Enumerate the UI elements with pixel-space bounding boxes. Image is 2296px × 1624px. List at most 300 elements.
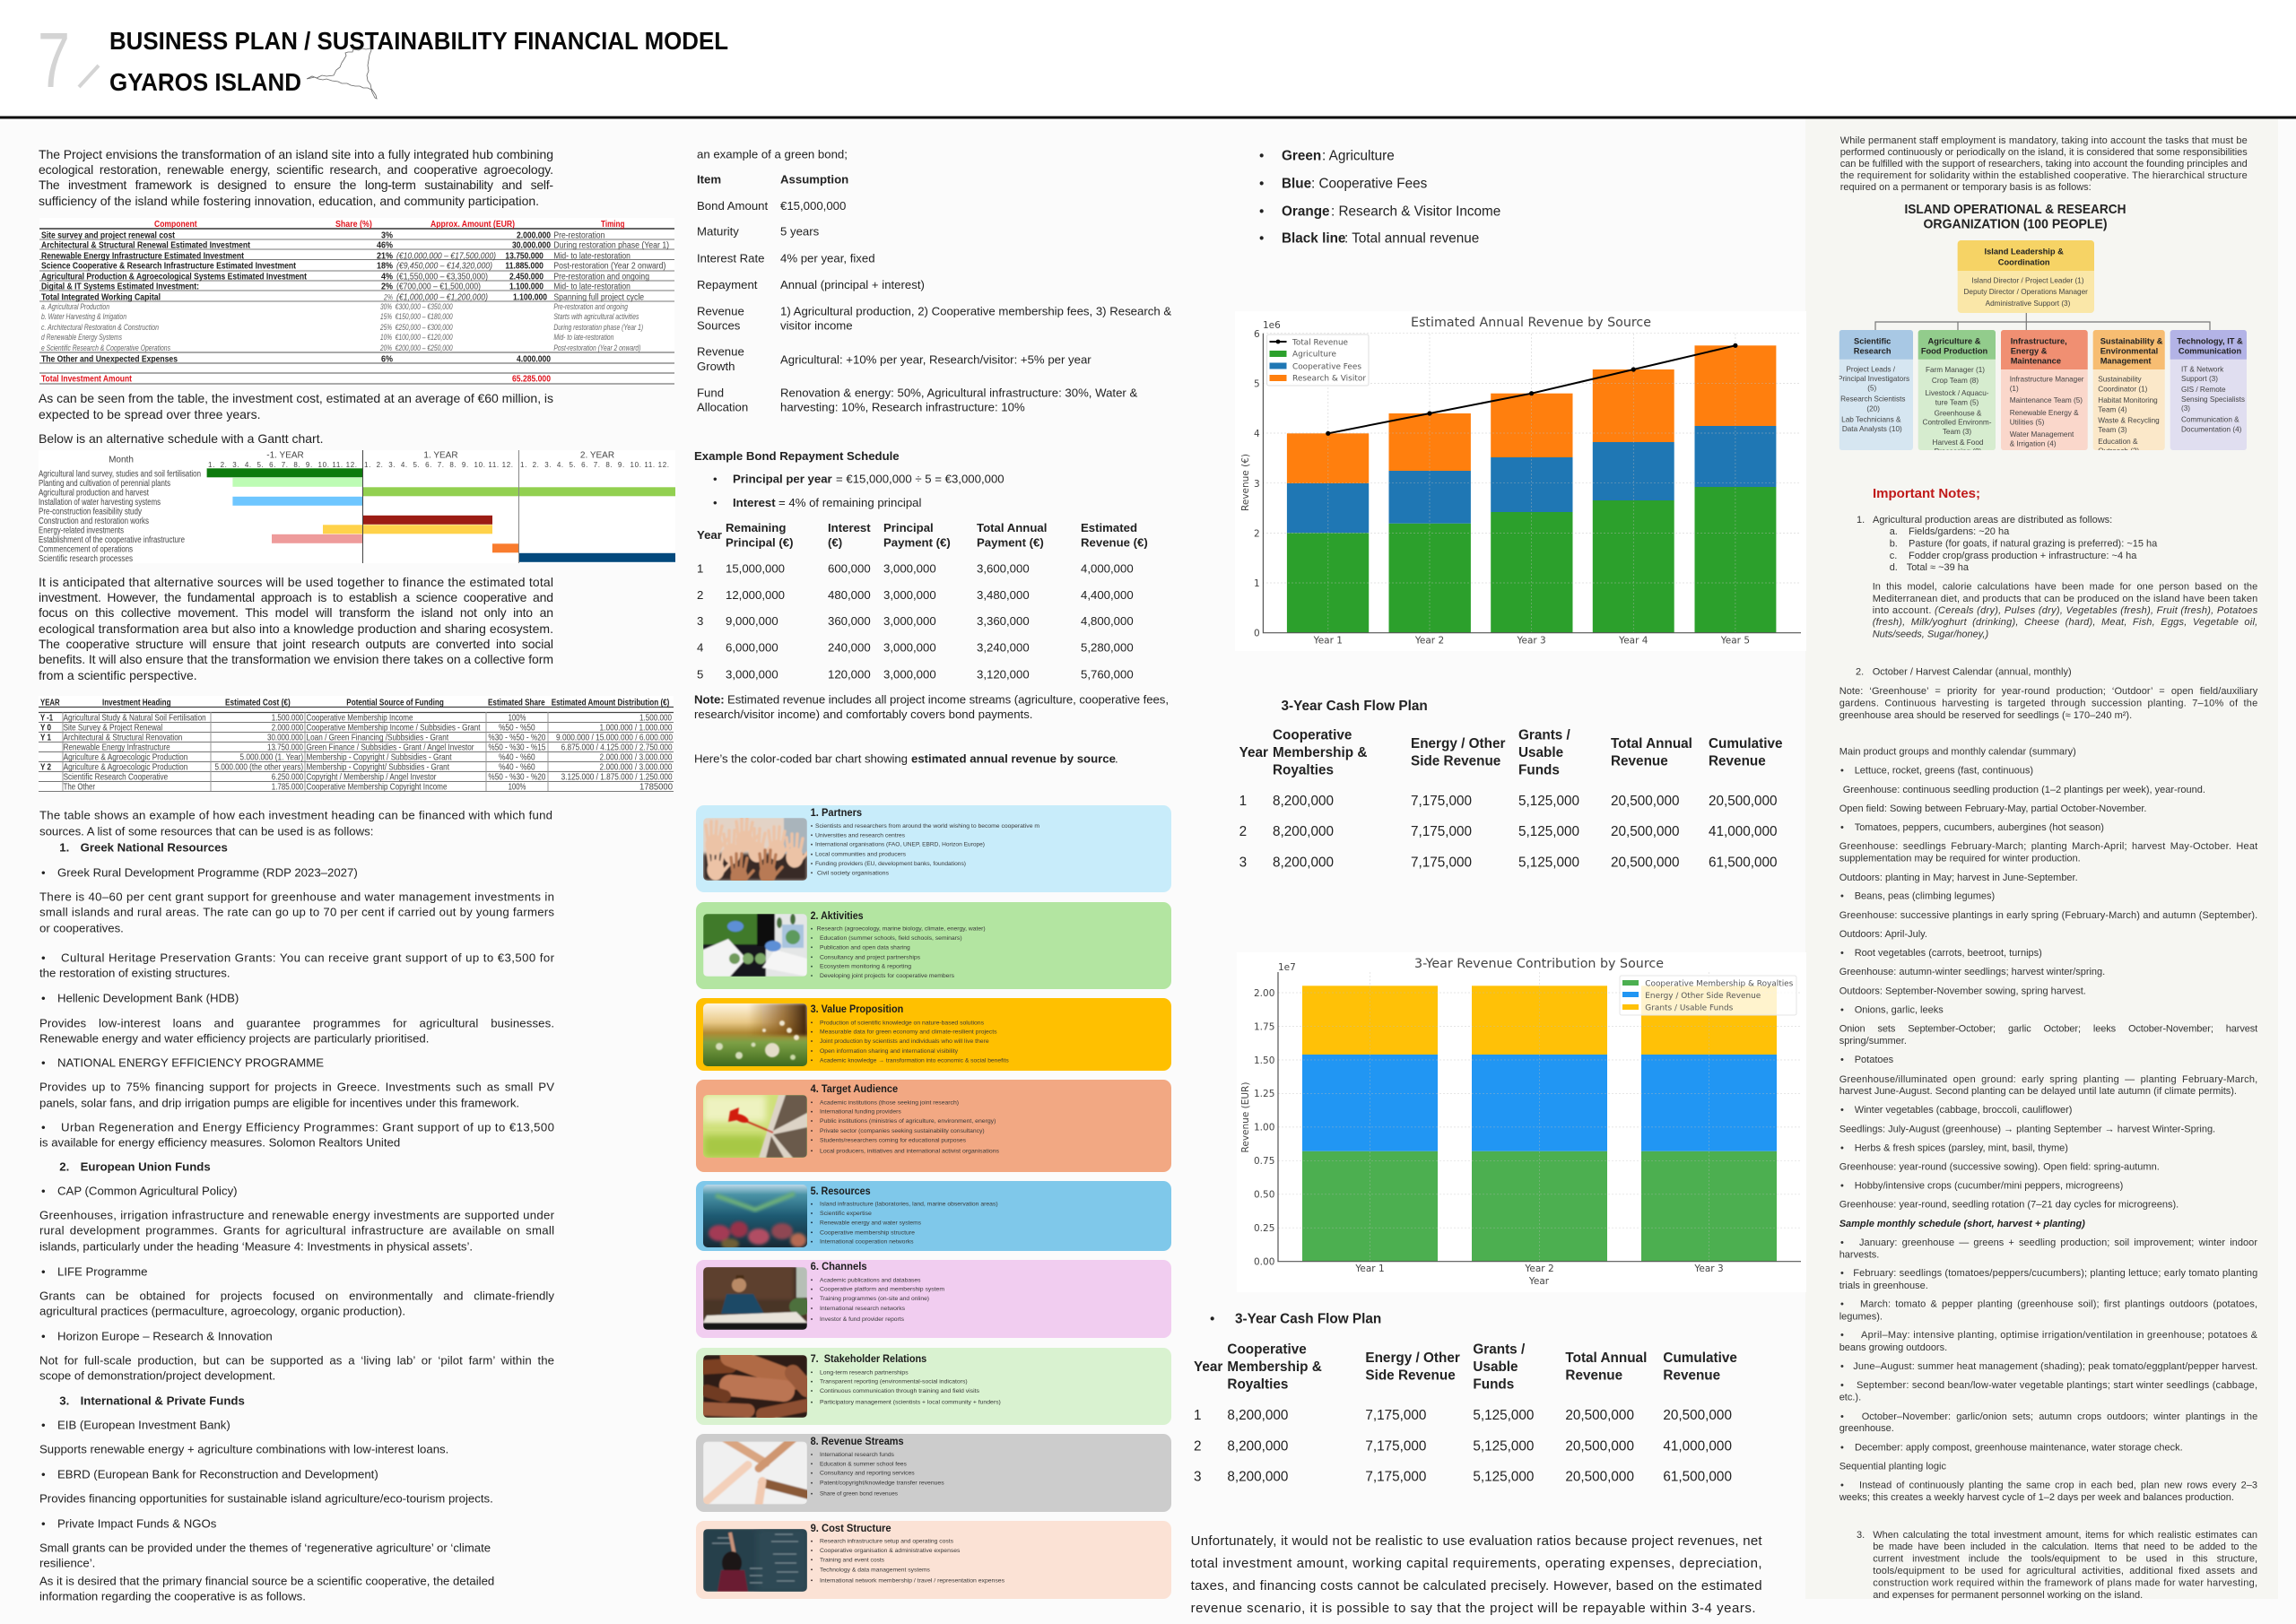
note 2: harvest calendar: Onions, garlic, leeks [1855,1005,1944,1016]
repayment table: Principal [883,521,934,534]
text: investment cost summary: As can be seen from the table, the investment cost, estimated at an average of €60 million, is [39,391,553,405]
investment cost table: Total Investment Amount [41,374,132,385]
column 4: staffing intro paragraph: can be fulfilled with the support of researchers, taking into account the founding principles and [1840,159,2248,169]
target audience list: Private sector (companies seeking sustainability consultancy) [820,1128,985,1134]
text: funding resources list: • [41,1329,46,1343]
text: funding resources list: agricultural practices (permaculture, agroecology, organic production). [39,1304,405,1318]
note 2: harvest calendar: Main product groups and monthly calendar (summary) [1839,746,2076,757]
axis labels: 2.00 [1254,988,1274,999]
bar chart intro: estimated annual revenue by source [911,751,1116,766]
column 2: green bond assumptions table: Growth [697,360,735,373]
text: financing approach paragraph: focus on this collective movement. This model will transform the island not only into an [39,605,553,620]
column 2: green bond assumptions table: Item [697,172,721,187]
revenue streams list: International research funds [820,1452,894,1458]
axis labels: Year 2 [1414,635,1444,646]
cost structure list: Technology & data management systems [820,1567,930,1573]
sample monthly schedule: March: tomato & pepper planting (greenhouse soil); first plantings outdoors (potatoes, [1860,1298,2257,1309]
investment cost table: 21% [377,251,394,262]
gantt labels: Pre-construction feasibility study [39,508,142,517]
text: funding resources list: Horizon Europe – Research & Innovation [57,1329,273,1343]
heading: 3-Year Cash Flow Plan [1281,699,1428,714]
investment cost table: 18% [377,261,394,272]
agriculture box: Processing (8) [1935,447,1982,456]
funding sources table: 1.000.000 / 1.000.000 [599,723,673,734]
leadership box: Coordination [1998,258,2050,267]
cash flow rows: Revenue [1565,1368,1622,1383]
text: funding resources list: The table shows an example of how each investment heading can be financed with which fund [39,809,552,821]
axis labels: Year 1 [1354,1264,1385,1274]
text: investment cost summary [39,391,553,446]
card 8: revenue streams: 8. Revenue Streams [811,1437,904,1447]
funding sources table: Y 0 [40,723,51,734]
axis labels: 4 [1254,429,1260,439]
cash flow rows: Cumulative [1663,1350,1737,1366]
infrastructure box: Renewable Energy & [2010,409,2079,417]
card 7: stakeholder relations [696,1348,1171,1425]
cash flow rows: 20,500,000 [1663,1408,1732,1423]
cash flow rows [1194,1342,1737,1485]
investment cost table: e Scientific Research & Cooperative Operations [41,343,170,352]
note 2: harvest calendar: harvest June-August. Second planting can be delayed until late autumn (if climate permits). [1839,1086,2237,1097]
cash flow rows: Total Annual [1611,736,1692,751]
agriculture box: Greenhouse & [1935,410,1982,418]
partners list [812,823,1039,876]
text: funding resources list: Provides up to 75% financing support for projects in Greece. Investments such as small PV [39,1080,554,1094]
repayment table: 240,000 [828,640,871,655]
partners list: Funding providers (EU, development banks, foundations) [815,861,966,867]
card 1: partners [696,805,1171,892]
note 2: harvest calendar: Potatoes [1855,1055,1894,1065]
bar chart: 3-year revenue contribution by source: 3-Year Revenue Contribution by Source [1414,957,1664,971]
note 2: harvest calendar: Note: ‘Greenhouse’ = priority for year-round production; ‘Outdoor’ = open field/auxiliary [1839,686,2258,697]
cash flow rows: 20,500,000 [1709,794,1778,809]
heading: Greek national resources: Greek National Resources [81,841,228,854]
revenue streams list [812,1452,944,1498]
resources list: International cooperation networks [820,1239,914,1246]
funding sources table: 5.000.000 (1. Year) [239,752,303,763]
text: funding resources list: Provides financing opportunities for sustainable island agriculture/eco-tourism projects. [39,1492,493,1505]
note 2: harvest calendar: 2. [1856,667,1864,678]
scientific research box: Lab Technicians & [1841,416,1901,424]
note 2: harvest calendar: • [1840,948,1844,959]
text: funding resources list: small islands and rural areas. The rate can go up to 70 per cent if carried out by young farmers [39,906,554,918]
note 3: investment calculation: construction work required within the framework of plans made for water harvesting, [1873,1577,2257,1588]
investment cost table: 4% [381,272,394,282]
stakeholder list: Long-term research partnerships [820,1369,909,1376]
sample monthly schedule: • [1840,1268,1844,1279]
funding sources table: Cooperative Membership Copyright Income [307,782,448,793]
cash flow rows: 61,500,000 [1663,1469,1732,1485]
bond rules bullets: = €15,000,000 ÷ 5 = €3,000,000 [836,472,1004,486]
heading: 3-Year Cash Flow Plan [1235,1311,1381,1327]
photo: person writing at table [703,1267,807,1330]
card 5: resources: 5. Resources [811,1186,871,1197]
axis labels: 1.25 [1254,1089,1274,1099]
target audience list: Students/researchers coming for educational purposes [820,1137,966,1143]
cash flow rows: Funds [1518,762,1560,778]
heading: European Union funds: European Union Funds [81,1160,211,1173]
text: repayment conclusion: Unfortunately, it would not be realistic to use evaluation ratios because project revenues, net [1191,1533,1762,1549]
note 2: harvest calendar: Greenhouse: successive plantings in early spring (February-March) and autumn (September). [1839,910,2257,921]
repayment table [697,521,1148,682]
heading: international and private funds: International & Private Funds [81,1394,245,1408]
cash flow rows: 7,175,000 [1411,855,1472,870]
photo: linked wrists [703,1442,807,1505]
resources list: Island infrastructure (laboratories, land, marine observation areas) [820,1202,998,1208]
column 1: intro paragraph: sufficiency of the island while fostering innovation, education, and community participation. [39,194,539,208]
axis labels: 0.50 [1254,1190,1274,1201]
sustainability box: Habitat Monitoring [2098,396,2158,404]
repayment table: 3,240,000 [977,640,1030,655]
funding sources table: Estimated Cost (€) [225,698,291,708]
note 3: investment calculation: and expenses for permanent personnel working on the island. [1873,1590,2143,1601]
investment cost table: Component [154,219,197,230]
column 1: intro paragraph: ecological restoration, renewable energy, scientific research, and cooperative agroecology. [39,162,553,177]
investment cost table: (€9,450,000 – €14,320,000) [396,261,492,272]
icon: island outline [307,48,377,99]
repayment table: Remaining [726,521,786,534]
text: funding resources list: is available for energy efficiency measures. Solomon Realtors United [39,1135,400,1150]
channels list [812,1277,944,1323]
investment cost table: (€1,550,000 – €3,350,000) [396,272,488,282]
scientific research box: (20) [1866,405,1880,413]
sample monthly schedule: greenhouse. [1839,1423,1894,1434]
funding sources table: Green Finance / Subbsidies - Grant / Angel Investor [307,743,474,753]
gantt chart: -1. YEAR [266,450,304,461]
agriculture box: Agriculture & [1928,336,1981,345]
column 2: green bond assumptions table: 5 years [780,224,820,239]
cash flow rows: 20,500,000 [1611,855,1680,870]
funding sources table: YEAR [40,698,60,708]
resources list: Scientific expertise [820,1211,873,1217]
note 2: harvest calendar: Outdoors: planting in May; harvest in June-September. [1839,873,2078,883]
month numbers [208,461,669,469]
photo: lab samples [703,914,807,977]
sample monthly schedule: • [1840,1330,1844,1341]
sample monthly schedule: June–August: summer heat management (shading); peak tomato/eggplant/pepper harvest. [1853,1361,2257,1372]
note 2: harvest calendar: • [1840,1142,1844,1153]
column 2: green bond assumptions table: Fund [697,386,724,400]
column 2: green bond assumptions table: Renovation & energy: 50%, Agricultural infrastructure: 30%, Water & [780,386,1137,400]
investment cost table: 11.885.000 [505,261,544,272]
cash flow rows: 41,000,000 [1709,824,1778,839]
cash flow rows: Funds [1473,1377,1514,1392]
cash flow rows: 20,500,000 [1611,824,1680,839]
funding sources table: 6.250.000 [272,772,303,783]
org chart: island operational and research organization [1838,202,2247,456]
column 2: green bond assumptions table [697,147,1171,414]
stacked bars [1287,345,1776,633]
card 9: cost structure [696,1521,1171,1599]
cash flow rows: 1 [1239,794,1247,809]
funding sources table: 2.000.000 / 3.000.000 [599,762,673,773]
investment cost table: Mid- to late-restoration [553,282,631,292]
funding sources table: 1.500.000 [272,713,303,724]
gantt labels: Agricultural land survey, studies and soil fertilisation [39,470,201,479]
card 8: revenue streams [696,1434,1171,1512]
repayment table: 3,600,000 [977,561,1030,576]
column 2: green bond assumptions table: an example of a green bond; [697,147,848,161]
note 1: agricultural production areas: Nuts/seeds, Sugar/honey,) [1873,630,1988,640]
axis labels: 6 [1254,329,1260,340]
investment cost table: Site survey and project renewal cost [41,230,175,241]
sample monthly schedule: January: greenhouse — greens + seedling production; soil improvement; winter indoor [1859,1238,2257,1248]
note 2: harvest calendar: Outdoors: September-November sowing, spring harvest. [1839,986,2086,997]
cash flow rows: Grants / [1473,1342,1526,1358]
axis labels: Revenue (EUR) [1240,1082,1251,1152]
note 3: investment calculation: tools/equipment to be used for agricultural activities, additional fixed assets and [1873,1566,2257,1576]
card 7: stakeholder relations: 7. Stakeholder Relations [811,1354,926,1365]
investment cost table: Total Integrated Working Capital [41,292,161,303]
axis labels: 2 [1254,529,1260,540]
text: funding resources list: Cultural Heritage Preservation Grants: You can receive grant support of up to €3,500 for [61,951,555,965]
bar chart: estimated annual revenue by source: Estimated Annual Revenue by Source [1411,316,1651,330]
target audience list: International funding providers [820,1109,901,1116]
column 2: green bond assumptions table: Sources [697,319,741,332]
funding sources table: Architectural & Structural Renovation [64,733,182,743]
target audience list: Public institutions (ministries of agriculture, environment, energy) [820,1118,996,1125]
sample monthly schedule: • [1840,1238,1844,1248]
target audience list [812,1099,999,1154]
text: financing approach paragraph: investment. However, the fundamental approach is to establish a science cooperative and [39,590,553,604]
scientific research box: Research [1854,346,1892,355]
sample monthly schedule: • [1840,1361,1844,1372]
revenue streams list: Patent/copyright/knowledge transfer revenues [820,1481,944,1487]
leadership box [1958,240,2094,313]
photo: coral reef [703,1185,807,1247]
investment cost table: Pre-restoration and ongoing [553,272,649,282]
note 1: agricultural production areas: In this model, calorie calculations have been made for one person based on the [1873,581,2257,592]
column 2: green bond assumptions table: Agricultural: +10% per year, Research/visitor: +5% per year [780,353,1091,366]
text: financing approach paragraph: ecological transformation area but also into a knowledge production and sharing ecosystem. [39,621,553,636]
value proposition list: Measurable data for green economy and climate-resilient projects [820,1029,997,1036]
funding sources table: The Other [64,782,95,793]
leadership box: Administrative Support (3) [1986,300,2071,308]
funding sources table: Estimated Share [488,698,545,708]
funding sources table: 9.000.000 / 15.000.000 / 6.000.000 [556,733,673,743]
card 3: value proposition [696,998,1171,1071]
sample monthly schedule: September: second bean/low-water vegetable plantings; start winter seedlings (cabbage, [1857,1380,2257,1391]
funding sources table: 13.750.000 [267,743,303,753]
investment cost table: Agricultural Production & Agroecological Systems Estimated Investment [41,272,307,282]
investment cost table: The Other and Unexpected Expenses [41,354,178,365]
investment cost table: During restoration phase (Year 1) [553,240,669,251]
value proposition list: Production of scientific knowledge on nature-based solutions [820,1020,984,1026]
note 1: agricultural production areas: Total ≈ ~39 ha [1907,562,1970,573]
sustainability box: Outreach (2) [2098,447,2140,456]
partners list: Universities and research centres [815,832,905,838]
repayment table: Year [697,528,722,542]
text: repayment conclusion: total investment amount, working capital requirements, operating expenses, depreciation, [1191,1556,1762,1571]
bar chart intro [694,751,1118,766]
investment cost table: Renewable Energy Infrastructure Estimated Investment [41,251,244,262]
repayment table: Total Annual [977,521,1047,534]
leadership box: Island Director / Project Leader (1) [1971,276,2084,285]
partners list: Scientists and researchers from around the world wishing to become cooperative m [815,823,1039,829]
investment cost table: c. Architectural Restoration & Construction [41,323,159,332]
infrastructure box: Energy & [2011,346,2048,355]
column 2: green bond assumptions table: Assumption [780,172,848,187]
scientific research box: Data Analysts (10) [1842,425,1902,433]
photo: dandelion meadow [703,1003,807,1066]
org chart title: ORGANIZATION (100 PEOPLE) [1923,217,2108,231]
investment cost table: Approx. Amount (EUR) [430,219,515,230]
text: funding resources list: • [41,1419,46,1431]
axis labels: 0.25 [1254,1223,1274,1234]
partners list: Local communities and producers [815,852,906,858]
sample monthly schedule: Instead of continuously planting the same crop in each bed, plan new rows every 2–3 [1859,1481,2257,1491]
text: funding resources list: • [41,992,46,1004]
cash flow rows: Year [1194,1359,1222,1375]
text: funding resources list: Greek Rural Development Programme (RDP 2023–2027) [57,866,358,879]
activities list: Publication and open data sharing [820,944,910,951]
funding sources table: Renewable Energy Infrastructure [64,743,170,753]
chart legend text: colour key: : Total annual revenue [1344,231,1479,246]
repayment table: 12,000,000 [726,588,785,602]
chart legend text: colour key: Orange [1282,204,1330,219]
note 1: agricultural production areas: Fields/gardens: ~20 ha [1909,526,2010,537]
agriculture box [1918,330,1996,456]
sample monthly schedule: etc.). [1839,1393,1861,1403]
cash flow rows: 8,200,000 [1273,824,1334,839]
chart legend text: colour key: Blue [1282,176,1311,192]
sample monthly schedule: trials in greenhouse. [1839,1281,1928,1291]
cash flow rows: Royalties [1273,762,1334,778]
repayment table: 3,000,000 [883,640,936,655]
repayment table: 3,120,000 [977,667,1030,682]
axis labels: Year 1 [1313,635,1343,646]
axis labels: Year 5 [1720,635,1750,646]
agriculture box: Livestock / Aquacu- [1925,389,1989,397]
cash flow rows: Side Revenue [1365,1368,1456,1383]
funding sources table: Agriculture & Agroecologic Production [64,752,187,763]
cash flow rows: 8,200,000 [1227,1438,1288,1455]
text: funding resources list: LIFE Programme [57,1264,147,1279]
partners list: Civil society organisations [817,870,889,876]
cash flow rows: 7,175,000 [1365,1469,1426,1485]
investment cost table: Starts with agricultural activities [553,312,639,321]
note 1: agricultural production areas: a. [1890,526,1898,537]
investment cost table: 4.000.000 [517,354,551,365]
cash flow rows: Cooperative [1227,1342,1307,1358]
cash flow rows: Royalties [1227,1377,1288,1392]
repayment table: (€) [828,536,842,549]
cost structure list [812,1539,1004,1584]
column 1: intro paragraph [39,147,553,208]
bar chart intro: . [1115,751,1118,766]
note 2: harvest calendar: Winter vegetables (cabbage, broccoli, cauliflower) [1855,1105,2072,1116]
cash flow rows: Revenue [1611,753,1668,769]
repayment table: 360,000 [828,614,871,628]
gantt labels: Planting and cultivation of perennial plants [39,479,170,489]
column 2: green bond assumptions table: Bond Amount [697,199,769,213]
column 2: green bond assumptions table: Repayment [697,278,758,291]
text: funding resources list: CAP (Common Agricultural Policy) [57,1184,238,1198]
investment cost table: a. Agricultural Production [41,302,109,311]
funding sources table: Investment Heading [102,698,170,708]
repayment table: 2 [697,588,703,602]
legend: Energy / Other Side Revenue [1645,992,1761,1001]
column 1: intro paragraph: The Project envisions the transformation of an island site into a fully integrated hub combining [39,147,553,161]
text: funding resources list: scope of demonstration/project development. [39,1368,275,1383]
axis labels: 5 [1254,378,1260,389]
funding sources table: Membership - Copyright/ Subbsidies - Grant [307,762,449,773]
gantt labels: Energy-related investments [39,525,124,536]
note: research/visitor income) and comfortably covers bond payments. [694,708,1032,721]
bond rules bullets: Principal per year [733,472,832,486]
cost structure list: Cooperative organisation & administrative expenses [820,1548,960,1554]
note 2: harvest calendar: greenhouse area should be reserved for seedlings (≈ 170–240 m²). [1839,710,2132,721]
funding sources table: Estimated Amount Distribution (€) [552,698,669,708]
text: funding resources list: the restoration of existing structures. [39,967,230,979]
infrastructure box: & Irrigation (4) [2010,439,2057,447]
panel: business model canvas cards [696,805,1171,1599]
resources list: Cooperative membership structure [820,1229,916,1236]
bond rules bullets: • [713,472,718,486]
axis labels: 1.50 [1254,1055,1274,1066]
heading: • [1210,1311,1214,1327]
text: funding resources list: Small grants can be provided under the themes of ‘regenerative agriculture’ or ‘climate [39,1541,491,1555]
investment cost table: €100,000 – €120,000 [396,333,453,342]
activities list: Ecosystem monitoring & reporting [820,964,912,970]
note 2: harvest calendar: spring/summer. [1839,1036,1907,1046]
cash flow rows: 41,000,000 [1663,1438,1732,1455]
text: financing approach paragraph: from a scientific perspective. [39,668,197,682]
funding sources table: Cooperative Membership Income [307,713,413,724]
funding sources table: 2.000.000 [272,723,303,734]
note 2: harvest calendar: • [1840,1105,1844,1116]
repayment table: 6,000,000 [726,640,778,655]
note 2: harvest calendar [1839,667,2258,1503]
column 2: green bond assumptions table: 4% per year, fixed [780,251,875,265]
note 2: harvest calendar: • [1840,1005,1844,1016]
gantt bars [207,468,675,562]
sustainability box: Coordinator (1) [2098,385,2148,393]
axis labels: Revenue (€) [1240,454,1251,511]
channels list: Investor & fund provider reports [820,1316,904,1323]
sustainability box: Management [2100,356,2152,365]
infrastructure box: Infrastructure Manager [2010,376,2084,384]
investment cost table [39,218,674,386]
repayment table: 15,000,000 [726,561,785,576]
cash flow rows: 5,125,000 [1473,1408,1534,1423]
repayment table: 3,360,000 [977,614,1030,628]
repayment table: 3,000,000 [883,561,936,576]
card 5: resources [696,1181,1171,1251]
note 1: agricultural production areas: Mediterranean diet, and products that can be produced on the island have been taken [1873,594,2257,604]
text: funding resources list: • [41,1184,46,1198]
note 2: harvest calendar: • [1840,822,1844,833]
investment cost table: Science Cooperative & Research Infrastructure Estimated Investment [41,261,296,272]
cash flow rows: 20,500,000 [1565,1408,1634,1423]
text: funding resources list: sources. A list of some resources that can be used is as follows: [39,825,373,838]
card 2: activities: 2. Aktivities [811,911,864,922]
technology box: Support (3) [2181,375,2218,383]
chart legend text: colour key: Green [1282,149,1321,163]
sample monthly schedule: • [1840,1481,1844,1491]
bond rules bullets [713,472,1004,509]
photo: stacked hands [703,1355,807,1418]
text: funding resources list: • [41,1121,46,1133]
investment cost table: Pre-restoration and ongoing [553,302,628,311]
infrastructure box: Maintenance Team (5) [2010,396,2083,404]
funding sources table [39,696,674,793]
technology box [2170,330,2247,450]
cash flow rows: Membership & [1273,745,1367,760]
sustainability box: Sustainability & [2100,336,2163,345]
repayment table: 4 [697,640,703,655]
investment cost table: 15% [380,312,392,321]
